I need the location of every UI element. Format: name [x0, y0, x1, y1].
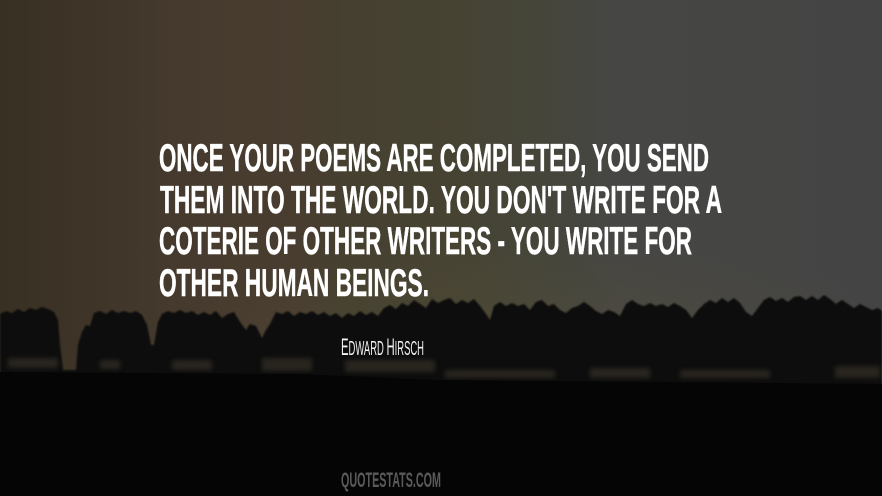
quote text [159, 137, 722, 305]
tree line silhouette [0, 295, 882, 390]
quote text: OTHER HUMAN BEINGS. [159, 262, 429, 305]
dark foreground field [0, 372, 882, 496]
canopy silhouette [0, 295, 882, 390]
author attribution: EDWARD HIRSCH [341, 334, 424, 361]
light showing low between trunks [8, 358, 880, 378]
background: dusk sky [0, 0, 882, 390]
footer watermark: QUOTESTATS.COM [341, 469, 441, 492]
